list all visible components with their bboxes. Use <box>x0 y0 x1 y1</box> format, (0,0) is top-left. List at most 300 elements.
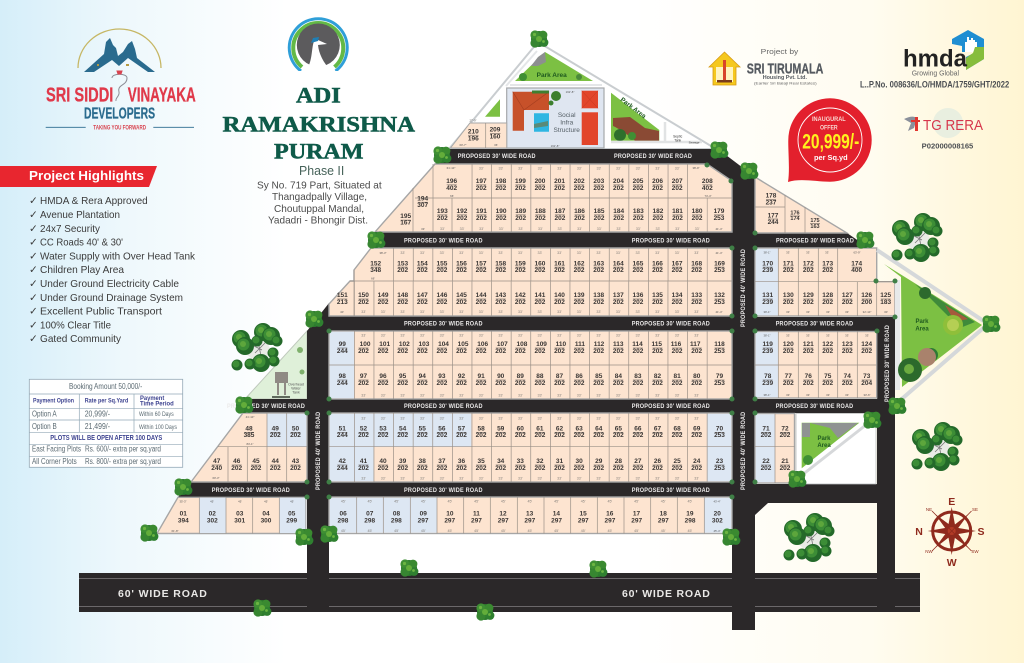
plot block: 01 to 05: 394 <box>178 517 189 524</box>
plot row: 99 to 118: 244 <box>337 348 348 355</box>
septic tank and sewage labels: Tank <box>674 138 682 142</box>
septic tank and sewage labels: Septic <box>673 134 683 138</box>
road: 30 ft fifth row <box>178 482 877 515</box>
highlights list: ✓ <box>29 223 38 235</box>
social infrastructure plot <box>507 88 604 148</box>
road labels: PROPOSED 30' WIDE ROAD <box>632 404 710 410</box>
table: booking and payment options: Option B <box>32 422 57 431</box>
plot block: 43 to 50: 202 <box>290 432 301 439</box>
logo: peacock emblem <box>289 19 347 78</box>
corner plots 151 152 169 132: 213 <box>337 299 348 306</box>
plot block: 43 to 50: 45 <box>252 458 260 465</box>
plot block: 01 to 05: 01 <box>180 510 187 518</box>
road: 30 ft fourth row <box>243 399 877 413</box>
table: booking and payment options: East Facing Plots <box>32 445 81 454</box>
plot block: 73 to 78 and 119 to 124: 202 <box>803 380 814 387</box>
plot row: 197 to 207 <box>476 166 683 192</box>
plot block: 01 to 05: 301 <box>234 517 246 524</box>
plot block: 06 to 20: 298 298 298 297 297 297 297 297 297 297 297 297 297 298 <box>338 517 696 524</box>
plot block: 174 to 178 <box>755 177 847 233</box>
icon: tree diagonal link <box>740 162 758 180</box>
plots 209 and 210: 160 <box>490 134 501 140</box>
table: booking and payment options: 20,999/- <box>85 410 110 419</box>
plot block: 73 to 78 and 119 to 124: 202 <box>783 380 794 387</box>
icon: compass rose: N <box>915 526 923 538</box>
plot row: 79 to 98: 97 96 95 94 93 92 91 90 89 88 87 86 85 84 83 82 81 80 <box>360 373 701 380</box>
plot block: 125 to 131 and 170 to 174: 202 <box>783 267 794 274</box>
logo: Sri Siddi Vinayaka Developers <box>46 29 196 132</box>
logo: Sri Siddi Vinayaka Developers: SRI SIDDI <box>46 85 113 107</box>
plot block: 174 to 178: 244 <box>768 219 779 226</box>
icon: tree plot 05 corner <box>295 528 313 546</box>
plot row: 23 to 42: 42 <box>339 458 346 465</box>
road labels: PROPOSED 30' WIDE ROAD <box>776 404 854 410</box>
corner plots 194 195 196 208 179 <box>400 166 725 231</box>
corner plots 194 195 196 208 179: 41'-4" <box>715 227 723 231</box>
plot row: 193 to 180: 202 202 202 202 202 202 202 202 202 202 202 202 202 202 <box>437 215 703 222</box>
plot row: 99 to 118: 99 <box>339 341 346 348</box>
road labels: PROPOSED 40' WIDE ROAD <box>316 411 322 490</box>
icon: tree road two left <box>367 231 385 249</box>
plot block: 174 to 178: 177 <box>768 212 779 220</box>
logo: TG RERA: TG RERA <box>923 117 983 134</box>
icon: tree road four left <box>235 396 253 414</box>
plot row: 197 to 207: 202 202 202 202 202 202 202 202 202 202 202 <box>476 185 683 192</box>
plot block: 43 to 50: 44 <box>272 458 279 465</box>
icon: compass rose: SE <box>972 507 978 512</box>
plot block: 06 to 20: 06 07 08 09 10 11 12 13 14 15 16 17 18 19 <box>339 510 694 518</box>
plot block: 73 to 78 and 119 to 124: 119 <box>762 341 773 348</box>
plots 209 and 210: 27'-9" <box>469 118 477 122</box>
road labels: PROPOSED 30' WIDE ROAD <box>212 488 290 494</box>
plot row: 51 to 70: 244 <box>337 432 348 439</box>
icon: compass rose: SW <box>971 549 979 554</box>
plot block: 125 to 131 and 170 to 174: 127 <box>842 292 853 299</box>
logo: TG RERA <box>904 108 983 150</box>
plot block: 43 to 50: 46 <box>233 458 241 465</box>
table: booking and payment options: Rs. 800/- extra per sq.yard <box>85 457 161 466</box>
logo: Sri Tirumala Housing: SRI TIRUMALA <box>747 60 823 77</box>
plot row: 153 to 168: 153 154 155 156 157 158 159 160 161 162 163 164 165 166 167 168 <box>397 260 703 268</box>
plot block: 174 to 178: 163 <box>810 224 820 230</box>
plot row: 23 to 42: 41 40 39 38 37 36 35 34 33 32 31 30 29 28 27 26 25 24 <box>360 458 701 465</box>
plot block: 125 to 131 and 170 to 174: 400 <box>851 267 863 274</box>
road labels: PROPOSED 30' WIDE ROAD <box>404 404 483 410</box>
plot block: 21 22 71 72: 202 <box>761 432 772 439</box>
road labels: PROPOSED 30' WIDE ROAD <box>776 239 854 245</box>
plot row: 193 to 180 <box>437 208 703 231</box>
plot block: 125 to 131 and 170 to 174: 131 <box>762 292 774 299</box>
plot row: 99 to 118: 253 <box>714 348 725 355</box>
highlights list: ✓ <box>29 264 38 276</box>
small triangular park area <box>796 414 876 484</box>
plot block: 125 to 131 and 170 to 174: 170 <box>762 260 774 268</box>
text block: phase and site address: Sy No. 719 Part, Situated at <box>257 180 382 192</box>
plot block: 125 to 131 and 170 to 174: 30' <box>884 310 888 314</box>
plot block: 125 to 131 and 170 to 174: 39'-1" <box>763 310 771 314</box>
plot row: 51 to 70: 33' 33' 33' 33' 33' 33' 33' 33' 33' 33' 33' 33' 33' 33' 33' 33' 33' 33' <box>361 416 699 420</box>
left overhead water tank area: Tank <box>292 390 300 394</box>
right park area <box>611 93 659 141</box>
corner plots 194 195 196 208 179: 196 <box>446 178 458 185</box>
plot block: 73 to 78 and 119 to 124: 33' <box>786 334 790 338</box>
corner plots 151 152 169 132: 66' <box>371 276 375 280</box>
plot block: 43 to 50: 49 <box>272 426 279 432</box>
plot block: 125 to 131 and 170 to 174: 33' <box>786 250 790 254</box>
plot block: 125 to 131 and 170 to 174: 202 <box>822 299 834 306</box>
table: booking and payment options: Within 100 Days <box>139 424 178 431</box>
plot block: 01 to 05: 302 <box>207 517 218 524</box>
road labels: 60' WIDE ROAD <box>118 588 207 600</box>
plot block: 73 to 78 and 119 to 124: 202 <box>842 380 853 387</box>
large right park area: Park <box>915 319 929 325</box>
plot block: 43 to 50: 202 <box>290 465 301 472</box>
plot row: 79 to 98: 33' 33' 33' 33' 33' 33' 33' 33' 33' 33' 33' 33' 33' 33' 33' 33' 33' 33' <box>361 393 699 397</box>
highlights list: HMDA & Rera Approved <box>40 195 148 207</box>
plot row: 51 to 70: 70 <box>716 426 723 432</box>
plot block: 01 to 05: 61'-8" <box>171 529 179 533</box>
plot block: 73 to 78 and 119 to 124: 38'-1" <box>763 334 771 338</box>
small triangular park area: Park <box>817 436 831 442</box>
plot row: 193 to 180: 33' 33' 33' 33' 33' 33' 33' 33' 33' 33' 33' 33' 33' 33' <box>440 227 700 231</box>
plot block: 125 to 131 and 170 to 174: 202 <box>803 267 814 274</box>
highlights list: Children Play Area <box>40 264 124 276</box>
corner plots 194 195 196 208 179: 38'-9" <box>692 166 700 170</box>
plot row: 99 to 118: 33' 33' 33' 33' 33' 33' 33' 33' 33' 33' 33' 33' 33' 33' 33' 33' 33' 33' <box>361 333 699 337</box>
road labels: PROPOSED 30' WIDE ROAD <box>776 322 854 328</box>
corner plots 151 152 169 132: 38'-3" <box>379 251 387 255</box>
text block: phase and site address: Choutuppal Mandal, <box>274 203 364 215</box>
plot block: 73 to 78 and 119 to 124: 73 <box>863 373 871 380</box>
logo: HMDA: Growing Global <box>912 69 959 78</box>
plot block: 43 to 50: 60'-3" <box>212 476 220 480</box>
plot block: 73 to 78 and 119 to 124: 33' <box>806 393 810 397</box>
corner plots 151 152 169 132: 152 <box>370 260 382 268</box>
table: booking and payment options: 21,499/- <box>85 422 110 431</box>
icon: compass rose: W <box>947 557 957 569</box>
plot row: 23 to 42: 244 <box>337 465 348 472</box>
icon: HMDA tile <box>952 30 984 70</box>
plot block: 125 to 131 and 170 to 174: 200 <box>861 299 873 306</box>
corner plots 151 152 169 132 <box>337 251 725 314</box>
plot block: 125 to 131 and 170 to 174: 173 <box>822 260 834 268</box>
plot row: 23 to 42: 33' 33' 33' 33' 33' 33' 33' 33' 33' 33' 33' 33' 33' 33' 33' 33' 33' 33' <box>361 476 699 480</box>
text block: phase and site address: Thangadpally Village, <box>272 191 367 203</box>
plot row: 153 to 168: 33' 33' 33' 33' 33' 33' 33' 33' 33' 33' 33' 33' 33' 33' 33' 33' <box>400 251 699 255</box>
plot block: 125 to 131 and 170 to 174: 202 <box>803 299 814 306</box>
plots 209 and 210: 36' <box>494 143 498 147</box>
highlights list: ✓ <box>29 250 38 262</box>
table: booking and payment options: Within 60 Days <box>139 411 174 418</box>
logo: Sri Siddi Vinayaka Developers: DEVELOPERS <box>84 105 155 122</box>
plot block: 43 to 50: 48 <box>245 426 253 432</box>
plot block: 01 to 05: 04 <box>262 510 270 518</box>
plot block: 43 to 50: 385 <box>244 432 255 439</box>
corner plots 194 195 196 208 179: 307 <box>417 202 429 209</box>
corner plots 194 195 196 208 179: 74'-4" <box>704 194 712 198</box>
road: top 30 ft with diagonal link <box>435 149 755 248</box>
table: booking and payment options: Rs. 600/- extra per sq.yard <box>85 445 161 454</box>
plot block: 01 to 05: 03 <box>236 510 244 518</box>
plot block: 06 to 20: 302 <box>712 517 723 524</box>
heading banner <box>0 166 157 187</box>
plot block: 125 to 131 and 170 to 174: 202 <box>783 299 794 306</box>
plot row: 51 to 70: 52 53 54 55 56 57 58 59 60 61 62 63 64 65 66 67 68 69 <box>360 426 701 432</box>
highlights list: Under Ground Electricity Cable <box>40 278 179 290</box>
icon: compass rose: NW <box>925 549 933 554</box>
text block: phase and site address: Phase II <box>299 164 344 178</box>
plot block: 174 to 178: 237 <box>766 199 777 206</box>
logo: Sri Siddi Vinayaka Developers: TAKING YOU FORWARD <box>93 126 147 132</box>
icon: compass rose: S <box>977 526 985 538</box>
plot block: 125 to 131 and 170 to 174: 32'-10" <box>863 310 871 314</box>
plot block: 125 to 131 and 170 to 174: 33' <box>786 310 790 314</box>
highlights list: ✓ <box>29 292 38 304</box>
plot block: 21 22 71 72: 202 <box>761 465 772 472</box>
corner plots 194 195 196 208 179: 208 <box>702 178 713 185</box>
plot row: 79 to 98: 244 <box>337 380 348 387</box>
corner plots 151 152 169 132: 151 <box>337 292 348 299</box>
corner plots 194 195 196 208 179: 33' <box>421 227 425 231</box>
small triangular park area: Area <box>817 443 831 449</box>
plots 209 and 210: 196 <box>468 136 479 143</box>
plot row: 193 to 180: 193 192 191 190 189 188 187 186 185 184 183 182 181 180 <box>437 208 703 215</box>
highlights list: Excellent Public Transport <box>40 306 162 318</box>
highlights list: ✓ <box>29 320 38 332</box>
corner plots 194 195 196 208 179: 61'-10" <box>447 166 455 170</box>
plot block: 01 to 05: 05 <box>288 510 296 518</box>
plot block: 73 to 78 and 119 to 124: 239 <box>762 348 774 355</box>
plot row: 150 to 133: 150 149 148 147 146 145 144 143 142 141 140 139 138 137 136 135 134 133 <box>358 292 703 299</box>
icon: tree over 60 ft road two <box>589 560 607 578</box>
callout: inaugural offer badge: 20,999/- <box>802 130 859 153</box>
road labels: PROPOSED 30' WIDE ROAD <box>404 488 483 494</box>
highlights list: CC Roads 40' & 30' <box>40 236 123 248</box>
plot row: 23 to 42 <box>337 458 725 480</box>
table: booking and payment options: Rate per Sq.Yard <box>85 398 128 405</box>
corner plots 151 152 169 132: 41'-4" <box>715 251 723 255</box>
plot block: 73 to 78 and 119 to 124: 202 <box>822 348 834 355</box>
logo: TG RERA: P02000008165 <box>922 141 973 150</box>
plot row: 150 to 133: 33' 33' 33' 33' 33' 33' 33' 33' 33' 33' 33' 33' 33' 33' 33' 33' 33' 33' <box>361 310 699 314</box>
road network <box>79 149 920 630</box>
plot row: 51 to 70: 202 202 202 202 202 202 202 202 202 202 202 202 202 202 202 202 202 202 <box>358 432 703 439</box>
plot block: 43 to 50: 202 <box>270 432 281 439</box>
plot block: 43 to 50: 240 <box>211 465 223 472</box>
highlights list: Under Ground Drainage System <box>40 292 183 304</box>
plot block: 01 to 05: 299 <box>286 517 298 524</box>
plot block: 125 to 131 and 170 to 174: 33' <box>845 310 849 314</box>
plot block: 06 to 20: 45' 45' 45' 45' 45' 45' 45' 45' 45' 45' 45' 45' 45' 45' <box>341 529 692 533</box>
plot block: 125 to 131 and 170 to 174: 128 <box>822 292 834 299</box>
plot row: 79 to 98: 79 <box>716 373 723 380</box>
logo: HMDA <box>860 30 1009 90</box>
icon: compass rose: NE <box>926 507 932 512</box>
corner plots 194 195 196 208 179: 66' <box>450 194 454 198</box>
table: booking and payment options: All Corner Plots <box>32 457 77 466</box>
highlights list: ✓ <box>29 209 38 221</box>
highlights list: 24x7 Security <box>40 223 101 235</box>
plot block: 125 to 131 and 170 to 174: 130 <box>783 292 794 299</box>
road labels: PROPOSED 30' WIDE ROAD <box>885 325 891 402</box>
top park area <box>515 52 593 81</box>
plot block: 73 to 78 and 119 to 124: 38'-1" <box>763 393 771 397</box>
plot block: 21 22 71 72: 21 <box>781 458 789 465</box>
road labels: 60' WIDE ROAD <box>622 588 710 600</box>
icon: tree below 60 ft road one <box>253 599 271 617</box>
plot block: 125 to 131 and 170 to 174: 239 <box>762 299 774 306</box>
plot block: 73 to 78 and 119 to 124: 202 <box>822 380 834 387</box>
plot row: 23 to 42: 202 202 202 202 202 202 202 202 202 202 202 202 202 202 202 202 202 202 <box>358 465 703 472</box>
icon: large tree cluster right <box>912 422 962 471</box>
plot block: 73 to 78 and 119 to 124: 123 <box>842 341 853 348</box>
highlights list: ✓ <box>29 306 38 318</box>
icon: yellow temple house <box>709 52 740 85</box>
icon: tree over 60 ft road one <box>400 559 418 577</box>
plot block: 73 to 78 and 119 to 124: 33' <box>806 334 810 338</box>
plot block: 125 to 131 and 170 to 174: 202 <box>842 299 853 306</box>
plot block: 73 to 78 and 119 to 124: 76 <box>805 373 812 380</box>
road labels: PROPOSED 30' WIDE ROAD <box>404 322 483 328</box>
plot block: 01 to 05: 45' <box>290 499 294 503</box>
corner plots 151 152 169 132: 348 <box>370 267 382 274</box>
icon: large tree cluster bottom <box>784 513 834 562</box>
plot block: 43 to 50: 84'-1" <box>246 442 254 446</box>
plot block: 73 to 78 and 119 to 124: 33' <box>826 334 830 338</box>
plot block: 01 to 05: 02 <box>209 510 216 518</box>
plot block: 73 to 78 and 119 to 124: 33'-6" <box>863 393 871 397</box>
plot block: 73 to 78 and 119 to 124: 202 <box>861 348 873 355</box>
plot row: 153 to 168: 202 202 202 202 202 202 202 202 202 202 202 202 202 202 202 202 <box>397 267 703 274</box>
plot block: 125 to 131 and 170 to 174: 126 <box>861 292 873 299</box>
road labels: PROPOSED 30' WIDE ROAD <box>458 154 536 160</box>
plot block: 125 to 131 and 170 to 174: 172 <box>803 260 814 268</box>
panel: top triangle with parks and social infrastructure <box>449 42 716 149</box>
callout: inaugural offer badge: per Sq.yd <box>814 153 848 162</box>
plot block: 125 to 131 and 170 to 174: 171 <box>783 260 794 268</box>
text block: phase and site address <box>257 164 382 226</box>
icon: tree road three left <box>305 310 323 328</box>
plot row: 51 to 70: 253 <box>714 432 725 439</box>
corner plots 151 152 169 132: 132 <box>714 292 725 299</box>
plot block: 21 22 71 72 <box>755 414 794 483</box>
road labels: PROPOSED 30' WIDE ROAD <box>614 154 692 160</box>
social infrastructure plot: Social <box>558 112 576 119</box>
icon: tree small park right <box>863 411 881 429</box>
logo: Sri Tirumala Housing: Housing Pvt. Ltd. <box>763 75 807 81</box>
icon: tree small park left <box>788 470 806 488</box>
plot block: 73 to 78 and 119 to 124: 75 <box>824 373 832 380</box>
plot row: 150 to 133: 202 202 202 202 202 202 202 202 202 202 202 202 202 202 202 202 202 202 <box>358 299 703 306</box>
plot block: 73 to 78 and 119 to 124: 204 <box>861 380 873 387</box>
plot row: 150 to 133 <box>358 292 703 314</box>
plots 209 and 210: 210 <box>468 129 479 136</box>
title: Adi Ramakrishna Puram: ADI <box>296 83 341 108</box>
icon: tree plot 01 corner <box>140 524 158 542</box>
icon: compass rose <box>915 496 985 569</box>
callout: inaugural offer badge: OFFER <box>820 125 838 131</box>
road: right 30 ft vertical <box>877 317 895 575</box>
left overhead water tank area <box>245 331 307 399</box>
highlights list: Water Supply with Over Head Tank <box>40 250 196 262</box>
plot block: 73 to 78 and 119 to 124: 33' <box>826 393 830 397</box>
plot block: 01 to 05: 35'-3" <box>179 499 187 503</box>
plot block: 23 to 70 <box>329 413 732 482</box>
icon: tree road five left <box>174 478 192 496</box>
icon: Ganesha line mark <box>112 71 127 101</box>
road: 30 ft third row <box>329 316 895 331</box>
logo: Sri Tirumala Housing <box>709 47 823 85</box>
left overhead water tank area: Overhead <box>288 382 304 386</box>
plot block: 125 to 131 and 170 to 174: 33' <box>806 310 810 314</box>
plot block: 125 to 131 and 170 to 174: 33' <box>806 250 810 254</box>
plot block: 174 to 178: 176 <box>790 210 800 216</box>
road: left 40 ft vertical <box>307 303 329 600</box>
highlights list: ✓ <box>29 236 38 248</box>
table: booking and payment options: Time Period <box>140 401 174 408</box>
plot block: 125 to 131 and 170 to 174: 125 <box>880 292 892 299</box>
plot block: 21 22 71 72: 72 <box>781 426 789 432</box>
road labels: PROPOSED 30' WIDE ROAD <box>632 488 710 494</box>
social infrastructure plot: Infra <box>560 120 574 126</box>
social infrastructure plot: 162'-8" <box>566 90 574 94</box>
large right park area <box>877 250 988 404</box>
table: booking and payment options: PLOTS WILL BE OPEN AFTER 100 DAYS <box>50 435 163 442</box>
plot block: 06 to 20: 20 <box>714 510 721 518</box>
plot block: 125 to 131 and 170 to 174: 174 <box>851 260 863 268</box>
title: Adi Ramakrishna Puram: PURAM <box>274 138 364 163</box>
title: Adi Ramakrishna Puram <box>222 83 415 163</box>
plot row: 99 to 118: 100 101 102 103 104 105 106 107 108 109 110 111 112 113 114 115 116 117 <box>360 341 701 348</box>
plot block: 73 to 78 and 119 to 124: 239 <box>762 380 774 387</box>
road labels <box>118 154 891 600</box>
logo: HMDA: hmda <box>903 46 968 73</box>
callout: inaugural offer badge <box>788 98 872 182</box>
icon: large tree cluster top right <box>892 213 942 262</box>
corner plots 151 152 169 132: 41'-4" <box>715 310 723 314</box>
callout: inaugural offer badge: INAUGURAL <box>812 117 846 123</box>
plot block: 73 to 78 and 119 to 124 <box>755 331 877 398</box>
plot block: 73 to 78 and 119 to 124: 78 <box>764 373 772 380</box>
plot block: 73 to 78 and 119 to 124: 33' <box>865 334 869 338</box>
plot block: 125 to 131 and 170 to 174: 38'-1" <box>763 250 771 254</box>
plot block: 132 to 169 and 151 152 <box>329 248 732 316</box>
plot block: 21 22 71 72: 22 <box>762 458 770 465</box>
plot block: 125 to 131 and 170 to 174: 63'-9" <box>853 250 861 254</box>
road labels: PROPOSED 40' WIDE ROAD <box>741 411 747 490</box>
highlights list: 100% Clear Title <box>40 320 111 332</box>
plot row: 23 to 42: 23 <box>716 458 723 465</box>
small green triangle <box>485 99 500 117</box>
icon: tree road one left <box>433 146 451 164</box>
plot block: 73 to 78 and 119 to 124: 122 <box>822 341 834 348</box>
highlights list: Avenue Plantation <box>40 209 120 221</box>
icon: large tree cluster left <box>232 323 282 372</box>
plot block: 174 to 178: 175 <box>810 218 820 224</box>
corner plots 194 195 196 208 179: 402 <box>702 185 713 192</box>
road: 60 ft wide road <box>79 573 920 612</box>
plot block: 73 to 78 and 119 to 124: 202 <box>803 348 814 355</box>
road: 30 ft second row <box>371 232 869 248</box>
road labels: PROPOSED 40' WIDE ROAD <box>741 249 747 327</box>
road labels: PROPOSED 30' WIDE ROAD <box>404 239 483 245</box>
plot row: 79 to 98: 253 <box>714 380 725 387</box>
corner plots 151 152 169 132: 40' <box>340 310 344 314</box>
table: booking and payment options <box>29 379 183 467</box>
social infrastructure plot: 162'-8" <box>551 144 559 148</box>
logo: Sri Tirumala Housing: Project by <box>761 47 799 56</box>
plot block: 43 to 50: 50 <box>292 426 299 432</box>
